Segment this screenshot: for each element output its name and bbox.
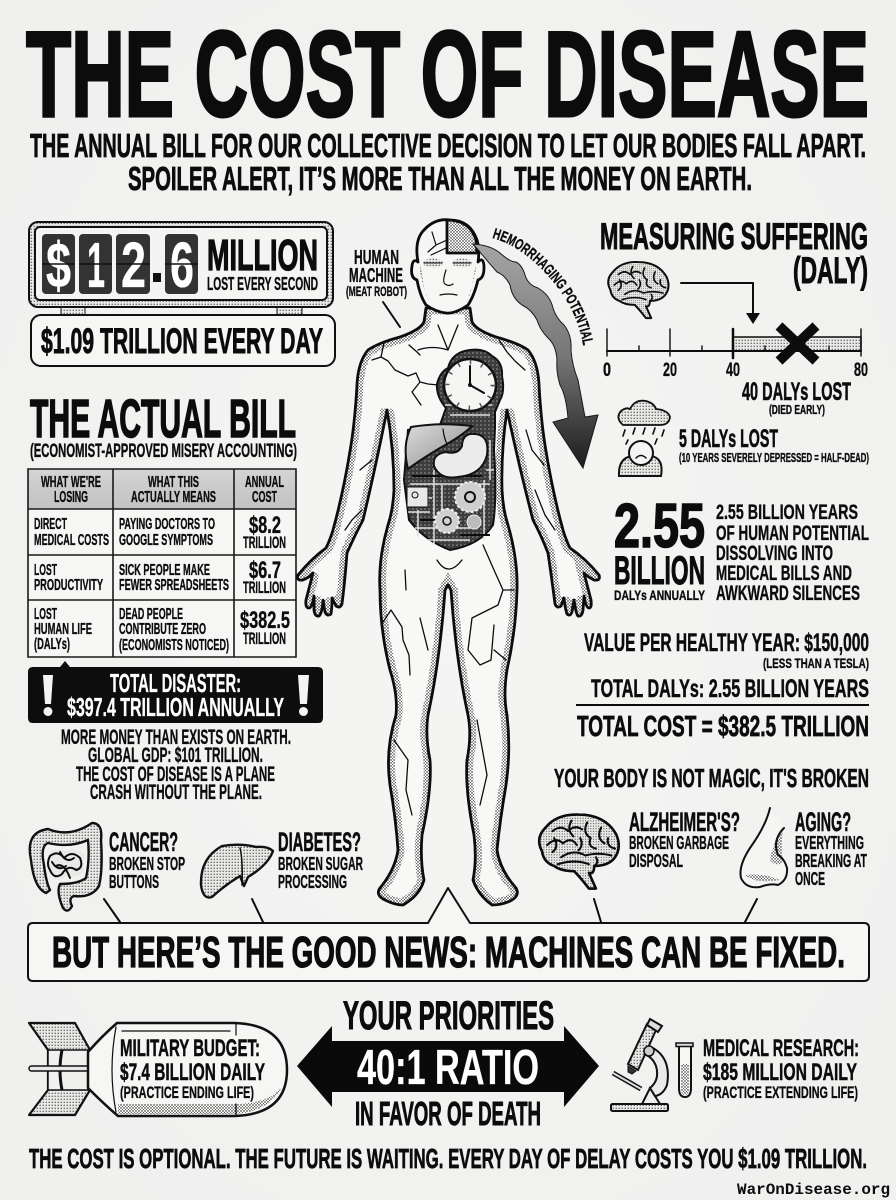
icon: microscope [611, 1019, 668, 1111]
arrow: 40:1 ratio [297, 1026, 599, 1107]
text: diabetes: PROCESSING [278, 872, 347, 892]
arrow: hemorrhaging potential [472, 228, 599, 470]
text: aging [795, 807, 867, 889]
stat: 2.55 billion: BILLION [614, 549, 705, 593]
flip digits: 2 [121, 229, 146, 301]
axis labels: 0 [603, 360, 611, 381]
icon: brain large [539, 815, 619, 889]
icon: bomb military budget [29, 1023, 287, 1116]
million label [207, 231, 318, 294]
row: lost human life: CONTRIBUTE ZERO [119, 621, 206, 638]
icon: test tube [676, 1043, 693, 1097]
text: cancer: BROKEN STOP [109, 854, 185, 874]
label: in favor of death: IN FAVOR OF DEATH [355, 1095, 541, 1132]
text: cancer: BUTTONS [109, 872, 159, 892]
heading: measuring suffering [600, 216, 868, 291]
text: alzheimer's [629, 807, 740, 871]
exposed brain [447, 220, 477, 253]
military budget text: MILITARY BUDGET: [120, 1035, 260, 1062]
flip digits: 6 [170, 229, 194, 301]
icon: exclamation right [298, 675, 309, 716]
stomach [434, 434, 487, 478]
text: 40 DALYs lost: (DIED EARLY) [769, 403, 825, 417]
row: direct medical costs: $8.2 [249, 512, 281, 539]
icon: depressed person under cloud [618, 401, 670, 476]
credit: website: WarOnDisease.org [737, 1181, 890, 1199]
text: cancer: CANCER? [109, 827, 178, 857]
table header: ACTUALLY MEANS [131, 489, 216, 506]
panel: scoreboard counter [29, 222, 333, 316]
text block: more money than exists: GLOBAL GDP: $101 TRILLION. [88, 744, 263, 767]
gear large [455, 482, 485, 512]
table header: COST [252, 489, 277, 506]
row: lost human life: (ECONOMISTS NOTICED) [119, 637, 229, 654]
row: lost productivity: FEWER SPREADSHEETS [119, 577, 229, 594]
row: lost human life: (DALYs) [34, 636, 70, 653]
row: lost productivity: $6.7 [249, 557, 281, 584]
row: lost productivity: PRODUCTIVITY [34, 577, 103, 594]
stat: 2.55 billion: 2.55 [614, 492, 705, 561]
icon: liver [201, 845, 273, 898]
text block: more money than exists: CRASH WITHOUT THE PLANE. [90, 781, 262, 804]
row: lost human life: $382.5 [240, 607, 290, 634]
gear small [435, 509, 459, 533]
axis labels: 80 [854, 360, 868, 381]
chip [407, 487, 428, 507]
clock [444, 359, 496, 411]
row: direct medical costs [34, 512, 286, 552]
callout: total disaster: TOTAL DISASTER: [110, 668, 241, 698]
text block: human potential [716, 501, 869, 605]
table header: WHAT THIS [148, 474, 199, 491]
arrow: hemorrhaging potential: HEMORRHAGING POTENTIAL [492, 228, 593, 346]
row: lost human life: TRILLION [243, 629, 286, 648]
body cracks [345, 325, 555, 815]
table: cost breakdown [28, 469, 296, 657]
heading: your priorities: YOUR PRIORITIES [343, 994, 554, 1038]
text: diabetes: BROKEN SUGAR [278, 854, 363, 874]
row: direct medical costs: DIRECT [34, 516, 67, 533]
chest mechanism [404, 350, 503, 550]
icon: brain small [608, 262, 669, 318]
label: human machine: MACHINE [349, 265, 403, 287]
icon: nose [740, 808, 787, 887]
callout: per day: $1.09 TRILLION EVERY DAY [41, 322, 323, 361]
text: alzheimer's: ALZHEIMER'S? [629, 807, 740, 837]
axis labels [603, 360, 868, 381]
table header: ANNUAL [245, 474, 284, 491]
text: medical research [703, 1035, 859, 1102]
banner: good news [28, 888, 869, 981]
text: diabetes: DIABETES? [278, 827, 361, 857]
table header: LOSING [54, 489, 88, 506]
row: direct medical costs: PAYING DOCTORS TO [119, 516, 215, 533]
row: direct medical costs: MEDICAL COSTS [34, 532, 109, 549]
text block: human potential: DISSOLVING INTO [716, 542, 833, 565]
flip digits: 1 [87, 229, 105, 301]
heading: the actual bill [30, 389, 297, 462]
head [412, 220, 484, 313]
heading: the actual bill: THE ACTUAL BILL [30, 389, 296, 449]
military budget text: (PRACTICE ENDING LIFE) [120, 1083, 254, 1102]
callout: total disaster [28, 661, 323, 723]
text: alzheimer's: BROKEN GARBAGE [629, 833, 729, 853]
arrow: 40:1 ratio: 40:1 RATIO [357, 1041, 539, 1095]
label: human machine: HUMAN [354, 247, 399, 269]
row: direct medical costs: TRILLION [243, 533, 286, 552]
stat: 2.55 billion: DALYs ANNUALLY [614, 587, 705, 603]
subtitle [30, 127, 866, 197]
text: diabetes [278, 827, 363, 892]
flip digits [42, 229, 198, 301]
text: 5 DALYs lost [679, 425, 869, 465]
row: direct medical costs: GOOGLE SYMPTOMS [119, 532, 213, 549]
x mark [779, 326, 816, 361]
million label: LOST EVERY SECOND [207, 274, 318, 294]
axis labels: 40 [726, 360, 740, 381]
row: lost human life [34, 606, 290, 654]
label: human machine: (MEAT ROBOT) [346, 283, 407, 299]
callout: total disaster: $397.4 TRILLION ANNUALLY [67, 692, 284, 722]
chart: DALY timeline [603, 326, 868, 381]
heading: the actual bill: (ECONOMIST-APPROVED MISERY ACCOUNTING) [30, 441, 297, 462]
text: 40 DALYs lost [742, 378, 851, 417]
million label: MILLION [207, 231, 318, 280]
row: lost human life: HUMAN LIFE [34, 621, 92, 638]
axis labels: 20 [663, 360, 677, 381]
flip digits: $ [46, 229, 71, 301]
row: lost productivity: TRILLION [243, 578, 286, 597]
liver [406, 424, 472, 469]
casing [88, 1023, 287, 1116]
row: lost productivity [34, 557, 286, 597]
arrow: brain to timeline [681, 283, 760, 324]
text: 5 DALYs lost: 5 DALYs LOST [679, 425, 778, 453]
figure: human machine body [298, 220, 599, 905]
calculation: total cost [576, 629, 869, 743]
row: lost productivity: SICK PEOPLE MAKE [119, 562, 210, 579]
fins [29, 1023, 90, 1115]
text: cancer [109, 827, 185, 892]
callout: per day [31, 315, 335, 366]
text block: more money than exists: THE COST OF DISEASE IS A PLANE [76, 763, 275, 786]
text block: more money than exists [61, 726, 291, 804]
stat: 2.55 billion [614, 492, 705, 603]
text block: more money than exists: MORE MONEY THAN EXISTS ON EARTH. [61, 726, 291, 749]
military budget text [120, 1035, 265, 1102]
text: alzheimer's: DISPOSAL [629, 851, 683, 871]
label: human machine [346, 247, 407, 327]
text: aging: ONCE [795, 869, 825, 889]
table header: WHAT WE'RE [41, 474, 101, 491]
row: lost productivity: LOST [34, 562, 57, 579]
icon: exclamation left [43, 675, 53, 716]
icon: intestines [30, 823, 102, 911]
table header [41, 474, 284, 506]
row: lost human life: LOST [34, 606, 57, 623]
row: lost human life: DEAD PEOPLE [119, 606, 183, 623]
military budget text: $7.4 BILLION DAILY [120, 1059, 265, 1086]
